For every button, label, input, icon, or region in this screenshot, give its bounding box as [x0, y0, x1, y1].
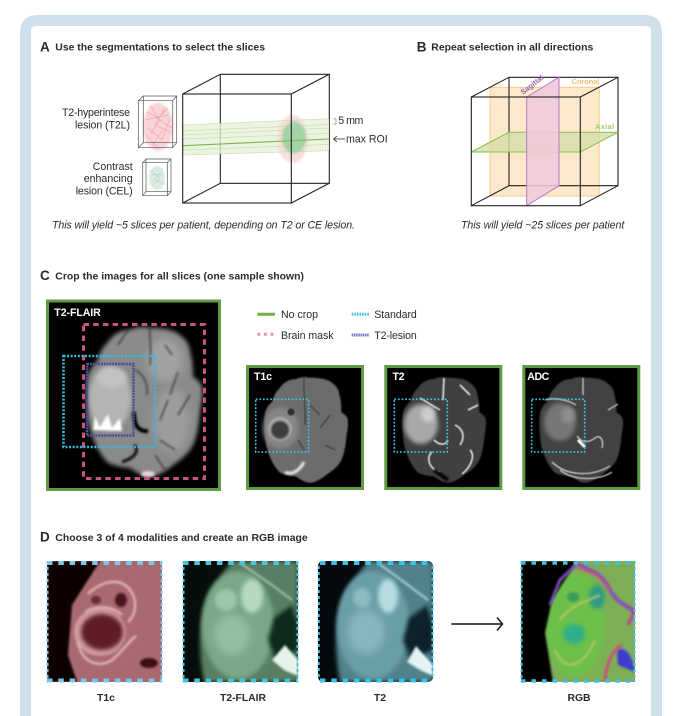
heading C: Crop the images for all slices (one sample shown) [55, 272, 304, 282]
brain mask crop [84, 324, 204, 478]
T2L label [62, 107, 130, 132]
dashed crop border T1c [47, 561, 162, 682]
standard crop T2 [394, 399, 447, 452]
T2 image [386, 366, 501, 488]
heading D: Choose 3 of 4 modalities and create an RGB image [55, 533, 308, 544]
ADC image [524, 366, 639, 488]
dashed crop border T2 [319, 563, 432, 680]
icon: CEL lesion cube [143, 159, 171, 196]
T2-FLAIR image [48, 301, 220, 490]
heading B: Repeat selection in all directions [431, 43, 594, 54]
caption B: This will yield ~25 slices per patient [461, 219, 625, 231]
heading D [40, 530, 308, 544]
heading B: B [417, 40, 427, 54]
caption A: This will yield ~5 slices per patient, depending on T2 or CE lesion. [52, 219, 355, 231]
heading B [417, 40, 594, 54]
standard crop ADC [532, 399, 585, 452]
panel D: RGB image [40, 530, 635, 704]
T2L label: T2-hyperintese [62, 107, 130, 119]
coronal plane [490, 87, 599, 196]
CEL label [76, 161, 133, 198]
5 mm bracket: 5 mm [338, 115, 363, 127]
legend: T2-lesion: T2-lesion [374, 330, 417, 342]
plane names: Sagittal [519, 73, 545, 97]
icon: T2L lesion cube [138, 96, 177, 151]
T2-lesion crop [87, 364, 134, 436]
legend: T2-lesion [352, 330, 417, 342]
legend: brain mask [257, 330, 334, 342]
T2 tinted tile [318, 561, 433, 704]
heading C [40, 268, 304, 283]
legend: no crop: No crop [281, 309, 318, 321]
heading A [40, 40, 265, 54]
max ROI arrow: max ROI [346, 134, 388, 146]
heading A: Use the segmentations to select the slices [55, 43, 265, 54]
plane names: Coronal [572, 77, 599, 86]
CEL label: lesion (CEL) [76, 186, 133, 198]
legend: standard: Standard [374, 309, 417, 321]
cube with three planes [471, 73, 618, 206]
label T1c: T1c [97, 693, 115, 704]
T2-FLAIR tinted tile [183, 561, 298, 704]
legend: standard [352, 309, 417, 321]
axial plane [471, 132, 618, 152]
heading A: A [40, 40, 50, 54]
CEL label: enhancing [84, 173, 133, 185]
panel B: all directions [417, 40, 625, 231]
T2 label: T2 [392, 371, 405, 383]
plane names: Axial [595, 122, 614, 131]
label RGB: RGB [567, 693, 591, 704]
label T2-FLAIR: T2-FLAIR [220, 693, 266, 704]
legend: no crop [257, 309, 318, 321]
RGB result tile [521, 561, 635, 704]
legend [257, 309, 417, 342]
FLAIR label: T2-FLAIR [54, 307, 101, 319]
T2L label: lesion (T2L) [75, 120, 130, 132]
CEL label: Contrast [93, 161, 133, 173]
panel A: select slices [40, 40, 388, 231]
panel C: crop images [40, 268, 639, 490]
standard crop T1c [256, 399, 309, 452]
heading D: D [40, 530, 50, 544]
plane names [519, 73, 614, 131]
dashed crop border FLAIR [183, 561, 298, 682]
heading C: C [40, 268, 50, 283]
T1c label: T1c [254, 371, 272, 383]
T1c tinted tile [47, 561, 162, 704]
legend: brain mask: Brain mask [281, 330, 334, 342]
dashed crop border RGB [521, 561, 635, 682]
label T2: T2 [374, 693, 386, 704]
ADC label: ADC [527, 371, 550, 383]
arrow to RGB [451, 618, 502, 630]
3D volume with slices [183, 74, 329, 203]
T1c image [248, 366, 362, 488]
standard crop [64, 356, 155, 447]
sagittal plane [527, 77, 559, 206]
